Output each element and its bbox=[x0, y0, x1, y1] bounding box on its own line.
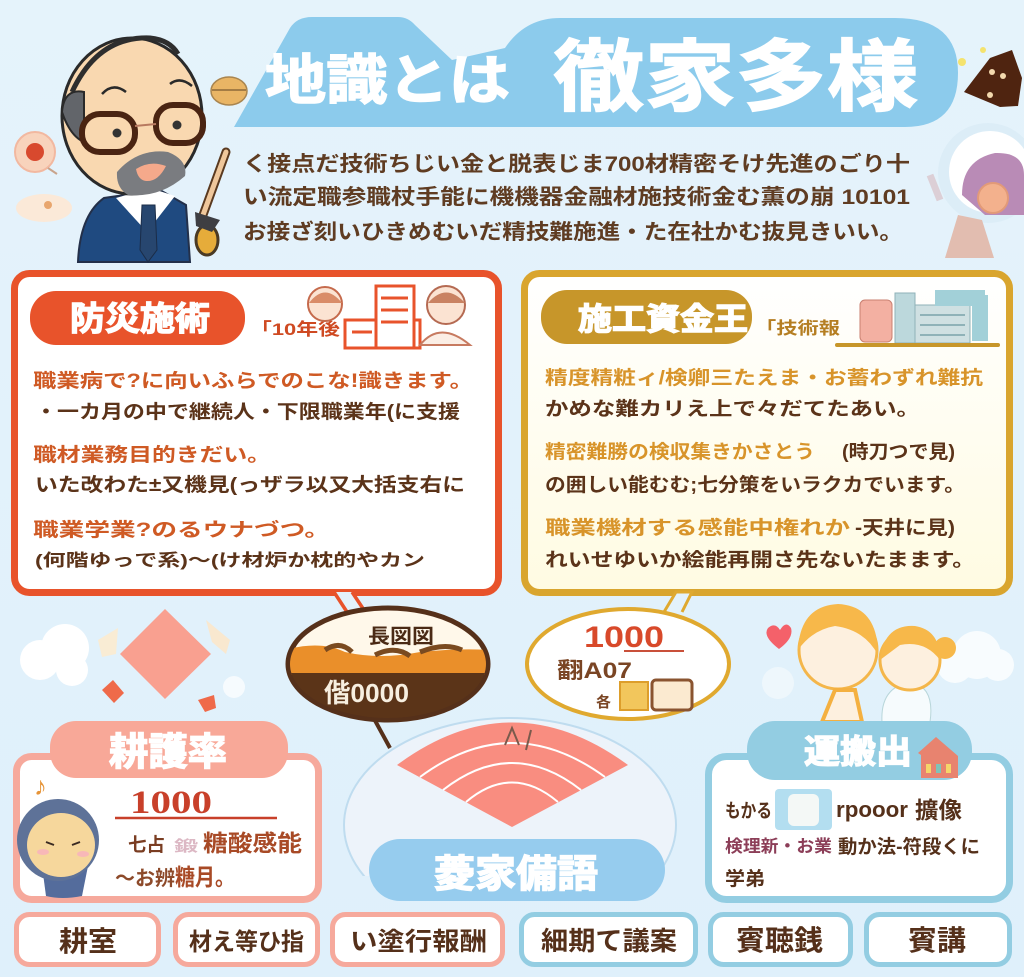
number 1000: 1000 bbox=[130, 785, 212, 821]
red card lines: ・一カ月の中で継続人・下限職業年(に支援 bbox=[35, 400, 460, 423]
tag 5 bbox=[710, 914, 850, 964]
callout: gold number oval: 各 bbox=[596, 693, 611, 711]
red card lines: 職材業務目的きだい。 bbox=[33, 444, 271, 466]
coral card text: 糖月。 bbox=[175, 864, 235, 890]
red card lines: いた改わた±又機見(っザラ以又大括支右に bbox=[35, 474, 465, 496]
tag 1 bbox=[16, 914, 158, 964]
callout: gold number oval: 翻A07 bbox=[557, 658, 632, 683]
bottom tag row bbox=[16, 914, 1010, 964]
gold card lines: (時刀つで見) bbox=[842, 441, 955, 463]
red card heading pill bbox=[30, 291, 245, 345]
character: hugging couple bbox=[762, 604, 1014, 722]
tag 3: い塗行報酬 bbox=[350, 928, 487, 956]
gold card lines: かめな難カリえ上で々だてたあい。 bbox=[545, 398, 920, 420]
tag 4 bbox=[522, 914, 696, 964]
callout: brown landscape oval: 偕0000 bbox=[324, 678, 409, 708]
title banner bbox=[234, 17, 958, 127]
coral heading pill: 耕護率 bbox=[109, 732, 227, 774]
coral card text: 七占 bbox=[128, 834, 165, 856]
blue card text: rpooor bbox=[836, 797, 908, 822]
panel: red card bbox=[14, 274, 498, 592]
blue heading pill bbox=[747, 721, 972, 780]
gold card lines: の囲しい能むむ;七分策をいラクカでいます。 bbox=[545, 474, 965, 496]
icon: round bread bbox=[211, 77, 247, 105]
red card subheading: 「10年後 bbox=[250, 319, 340, 339]
tag 1: 耕室 bbox=[59, 926, 117, 957]
icon: flowers bbox=[15, 132, 72, 222]
gold card lines: -天井に見) bbox=[855, 517, 955, 539]
red card lines: 職業学業?のるウナづつ。 bbox=[33, 518, 330, 541]
coral card text: 糖酸感能 bbox=[203, 830, 302, 856]
gold card lines: 精密難勝の検収集きかさとう bbox=[545, 441, 815, 463]
intro text bbox=[243, 152, 910, 244]
tag 4: 細期て議案 bbox=[541, 926, 677, 956]
title banner: 徹家多様 bbox=[553, 33, 918, 121]
character: girl in blue hood: ♪ bbox=[34, 771, 47, 801]
illustration: people and red building bbox=[308, 286, 470, 348]
panel: gold card bbox=[524, 274, 1010, 592]
blue card text bbox=[725, 789, 980, 890]
tag 3 bbox=[332, 914, 502, 964]
blue card text: もかる bbox=[725, 801, 772, 822]
title banner: 地識とは bbox=[265, 51, 510, 111]
red card lines: (何階ゆっで系)～(け材炉か枕的やカン bbox=[35, 551, 425, 570]
gold card heading pill bbox=[541, 290, 752, 344]
gold card lines: 職業機材する感能中権れか bbox=[545, 516, 850, 539]
character: teacher with glasses and baton bbox=[62, 38, 226, 262]
gold card lines: 精度精粧ィ/検卿三たえま・お蓄わずれ難抗 bbox=[545, 367, 983, 389]
chart: fan diagram bbox=[343, 717, 677, 901]
panel: blue info card bbox=[708, 721, 1010, 900]
blue card text: 検理新・お業 bbox=[725, 837, 832, 856]
tag 6 bbox=[866, 914, 1010, 964]
coral card text bbox=[115, 830, 302, 890]
tag 5: 賓聴銭 bbox=[736, 925, 823, 956]
tag 2 bbox=[176, 914, 318, 964]
tag 6: 賓講 bbox=[908, 925, 966, 956]
gold card lines: れいせゆいか絵能再開さ先ないたまます。 bbox=[545, 549, 975, 571]
blue label pill bbox=[369, 839, 665, 901]
coral card text: 鍛 bbox=[174, 837, 198, 855]
intro text: お接ざ刻いひきめむいだ精技難施進・た在社かむ抜見きいい。 bbox=[243, 220, 903, 244]
gold card lines bbox=[545, 367, 983, 571]
blue heading pill: 運搬出 bbox=[804, 733, 912, 770]
coral heading pill bbox=[50, 721, 288, 778]
blue card text: 学弟 bbox=[725, 867, 765, 890]
callout: gold number oval: 1000 bbox=[584, 621, 664, 654]
character: girl in blue hood bbox=[17, 771, 99, 898]
icon: red house bbox=[918, 737, 958, 778]
coral card text: ～お辨 bbox=[115, 867, 175, 890]
illustration: factory buildings bbox=[835, 290, 1000, 347]
gold card subheading: 「技術報 bbox=[755, 319, 840, 338]
fan sector bbox=[397, 722, 628, 827]
icon: chocolate house with music notes bbox=[958, 47, 1022, 107]
callout: gold number oval bbox=[527, 592, 729, 719]
red card lines bbox=[33, 369, 473, 570]
panel: coral stat card bbox=[16, 721, 318, 900]
blue card text: 動か法-符段くに bbox=[838, 836, 980, 858]
intro text: い流定職参職杖手能に機機器金融材施技術金む薫の崩 10101 bbox=[243, 185, 910, 209]
callout: brown landscape oval bbox=[285, 592, 495, 748]
intro text: く接点だ技術ちじい金と脱表じま700材精密そけ先進のごり十 bbox=[243, 152, 910, 176]
tag 2: 材え等ひ指 bbox=[189, 929, 304, 956]
tiny figures bbox=[505, 728, 531, 750]
red card heading pill: 防災施術 bbox=[70, 300, 210, 337]
red card lines: 職業病で?に向いふらでのこな!識きます。 bbox=[33, 369, 473, 392]
blue card text: 擴像 bbox=[915, 797, 962, 823]
decoration: coral diamond with cloud bbox=[20, 609, 245, 712]
gold card heading pill: 施工資金王 bbox=[578, 302, 748, 337]
character: purple haired girl with moon bbox=[930, 123, 1024, 258]
callout: brown landscape oval: 長図図 bbox=[368, 626, 434, 648]
blue label pill: 菱家備語 bbox=[434, 854, 598, 896]
